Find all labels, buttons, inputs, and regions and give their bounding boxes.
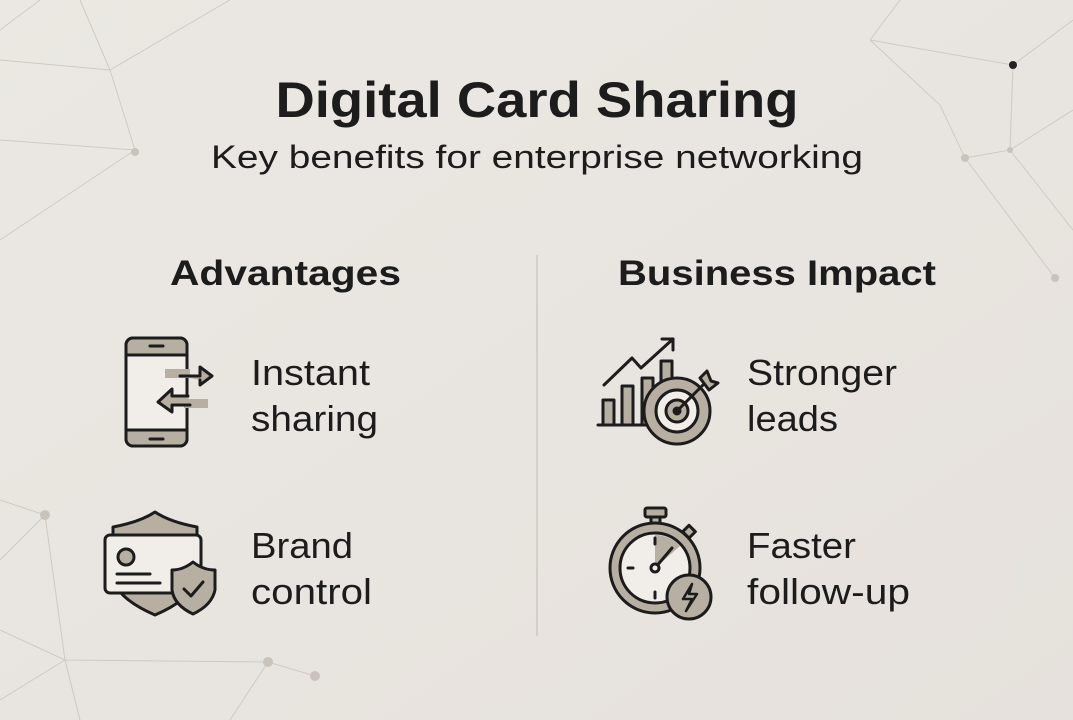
text: stronger leads: leads	[747, 398, 838, 439]
heading: business impact: Business Impact	[618, 254, 936, 293]
icon: stopwatch	[610, 508, 711, 619]
icon: growth chart target	[598, 339, 718, 444]
text: instant sharing	[251, 352, 378, 439]
text: brand control: control	[251, 571, 372, 612]
subtitle: Key benefits for enterprise networking	[211, 139, 863, 175]
icon: brand card shield	[105, 512, 215, 615]
heading: advantages: Advantages	[170, 254, 401, 293]
icon: phone sharing	[126, 338, 212, 446]
title: Digital Card Sharing	[276, 72, 798, 128]
text: brand control	[251, 525, 372, 612]
text: instant sharing: sharing	[251, 398, 378, 439]
text: faster follow-up: Faster	[747, 525, 856, 566]
text: faster follow-up	[747, 525, 910, 612]
text: faster follow-up: follow-up	[747, 571, 910, 612]
text: brand control: Brand	[251, 525, 353, 566]
text: stronger leads: Stronger	[747, 352, 897, 393]
text: stronger leads	[747, 352, 897, 439]
text: instant sharing: Instant	[251, 352, 370, 393]
